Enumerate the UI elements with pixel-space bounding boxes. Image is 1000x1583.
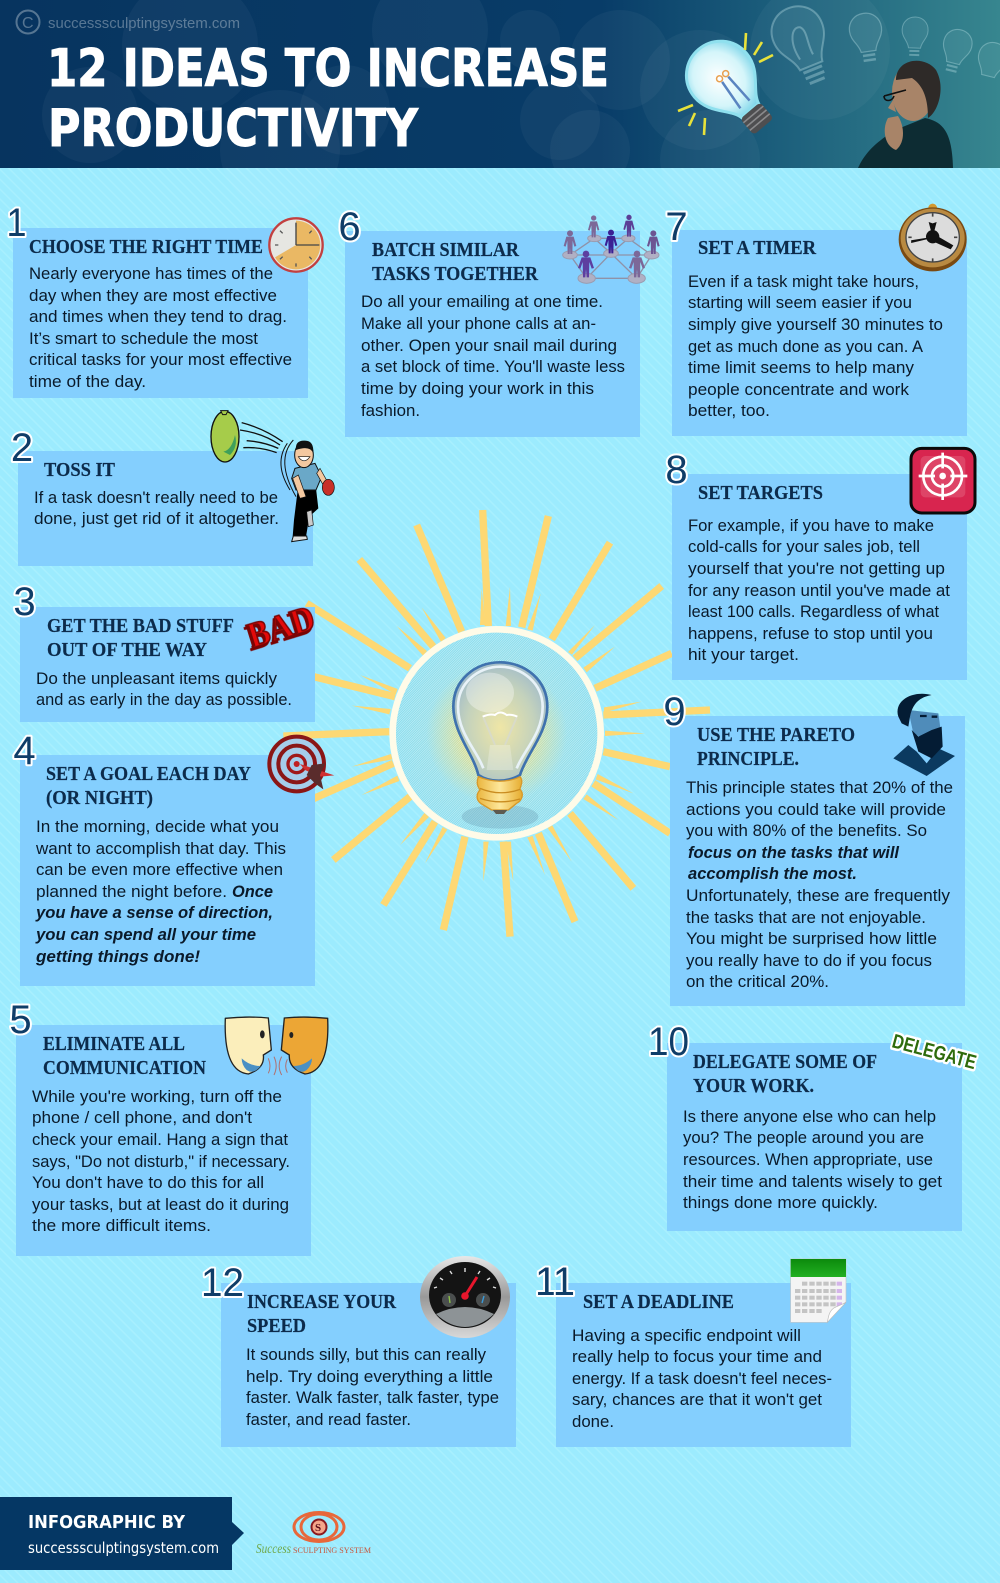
- body text: simply give yourself 30 minutes to: [688, 315, 943, 334]
- body text: [36, 669, 292, 709]
- body text: hit your target.: [688, 645, 799, 664]
- body text: Do the unpleasant items quickly: [36, 669, 277, 688]
- body text: [361, 292, 625, 420]
- icon: portrait of Pareto: [893, 694, 955, 776]
- body text: can be even more effective when: [36, 860, 283, 879]
- body text: get as much done as you can. A: [688, 337, 924, 356]
- body text: a set block of time. You'll waste less: [361, 357, 625, 376]
- logo: Success: [256, 1542, 291, 1557]
- heading: PRINCIPLE.: [697, 749, 799, 770]
- body text: For example, if you have to make: [688, 516, 934, 535]
- body text: says, "Do not disturb," if necessary.: [32, 1152, 290, 1171]
- body text: actions you could take will provide: [686, 800, 946, 819]
- body text: cold-calls for your sales job, tell: [688, 537, 920, 556]
- number 7: 7: [665, 205, 688, 249]
- heading: ELIMINATE ALL: [43, 1034, 185, 1055]
- body text: focus on the tasks that will: [688, 843, 900, 862]
- heading: TASKS TOGETHER: [372, 264, 539, 285]
- heading: COMMUNICATION: [43, 1058, 206, 1079]
- heading: SET A GOAL EACH DAY: [46, 764, 251, 785]
- heading: TOSS IT: [44, 460, 115, 481]
- body text: getting things done!: [35, 947, 200, 966]
- chalk light bulbs: [764, 0, 1000, 90]
- heading: OUT OF THE WAY: [47, 640, 207, 661]
- body text: [688, 516, 950, 664]
- body text: other. Open your snail mail during: [361, 336, 617, 355]
- heading: [43, 1034, 206, 1079]
- icon: calendar: [791, 1259, 846, 1322]
- body text: If a task doesn't really need to be: [34, 488, 278, 507]
- body text: better, too.: [688, 401, 770, 420]
- number 6: 6: [338, 205, 361, 249]
- body text: your tasks, but at least do it during: [32, 1195, 289, 1214]
- logo: S: [315, 1522, 321, 1534]
- body text: day when they are most effective: [29, 286, 277, 305]
- icon: delegate sticker: DELEGATE: [890, 1031, 978, 1074]
- watermark: [16, 10, 240, 34]
- body text: [572, 1326, 832, 1431]
- body text: you can spend all your time: [35, 925, 256, 944]
- body text: Even if a task might take hours,: [688, 272, 919, 291]
- body text: You don't have to do this for all: [32, 1173, 264, 1192]
- central sun with light bulb: [283, 510, 710, 937]
- icon: dart target: [269, 737, 334, 791]
- body text: resources. When appropriate, use: [683, 1150, 933, 1169]
- heading: YOUR WORK.: [693, 1076, 814, 1097]
- body text: time limit seems to help many: [688, 358, 915, 377]
- heading: [697, 725, 855, 770]
- glowing light bulb: [673, 27, 790, 149]
- body text: Is there anyone else who can help: [683, 1107, 936, 1126]
- body text: Having a specific endpoint will: [572, 1326, 801, 1345]
- sun disc: [393, 629, 601, 837]
- logo: [256, 1512, 371, 1557]
- heading: (OR NIGHT): [46, 788, 153, 809]
- icon: network of people: [563, 215, 660, 283]
- body text: help. Try doing everything a little: [246, 1367, 493, 1386]
- title: 12 IDEAS TO INCREASE: [47, 39, 609, 99]
- heading: CHOOSE THE RIGHT TIME: [29, 237, 263, 258]
- body text: accomplish the most.: [688, 864, 857, 883]
- body text: on the critical 20%.: [686, 972, 829, 991]
- number 5: 5: [9, 998, 32, 1042]
- body text: yourself that you're not getting up: [688, 559, 945, 578]
- footer credit ribbon: [0, 1497, 244, 1570]
- heading: INCREASE YOUR: [247, 1292, 397, 1313]
- body text: done, just get rid of it altogether.: [34, 509, 279, 528]
- body text: You might be surprised how little: [686, 929, 937, 948]
- body text: Make all your phone calls at an-: [361, 314, 596, 333]
- man thinking: [858, 61, 953, 168]
- icon: two talking faces: [225, 1017, 328, 1075]
- number 4: 4: [13, 729, 36, 773]
- panel 3: get the bad stuff out of the way: [13, 580, 319, 722]
- icon: speedometer: [420, 1256, 510, 1338]
- body text: time of the day.: [29, 372, 146, 391]
- body text: Unfortunately, these are frequently: [686, 886, 951, 905]
- body text: their time and talents wisely to get: [683, 1172, 942, 1191]
- panel 6: batch similar tasks together: [338, 205, 660, 437]
- body text: you have a sense of direction,: [35, 903, 273, 922]
- heading: BATCH SIMILAR: [372, 240, 520, 261]
- credit heading: INFOGRAPHIC BY: [28, 1512, 186, 1533]
- body text: planned the night before.: [36, 882, 227, 901]
- icon: clock: [269, 218, 323, 272]
- body text: the tasks that are not enjoyable.: [686, 908, 926, 927]
- panel 10: delegate some of your work: [648, 1020, 978, 1231]
- number 3: 3: [13, 580, 36, 624]
- body text: starting will seem easier if you: [688, 293, 912, 312]
- number 11: 11: [535, 1260, 575, 1304]
- icon: BAD stamp: BAD: [243, 598, 319, 656]
- icon: red target button: [911, 448, 975, 513]
- body text: want to accomplish that day. This: [35, 839, 286, 858]
- body text: [688, 272, 943, 420]
- panel 1: choose the right time: [6, 201, 323, 398]
- credit url: successsculptingsystem.com: [28, 1539, 219, 1557]
- icon: stopwatch: [899, 204, 967, 271]
- body text: [686, 778, 953, 991]
- body text: phone / cell phone, and don't: [32, 1108, 252, 1127]
- body text: and times when they tend to drag.: [29, 307, 287, 326]
- body text: sary, chances are that it won't get: [572, 1390, 822, 1409]
- body text: done.: [572, 1412, 614, 1431]
- panel 9: use the pareto principle: [663, 690, 965, 1006]
- number 9: 9: [663, 690, 686, 734]
- body text: This principle states that 20% of the: [686, 778, 953, 797]
- heading: DELEGATE SOME OF: [693, 1052, 877, 1073]
- body text: you with 80% of the benefits. So: [686, 821, 927, 840]
- body text: [32, 1087, 290, 1235]
- title: PRODUCTIVITY: [48, 99, 419, 159]
- body text: least 100 calls. Regardless of what: [688, 602, 939, 621]
- heading: [46, 764, 251, 809]
- panel 4: set a goal each day: [13, 729, 334, 986]
- body text: fashion.: [361, 401, 420, 420]
- body text: for any reason until you've made at: [688, 581, 950, 600]
- heading: SET TARGETS: [698, 483, 823, 504]
- body text: [35, 817, 286, 966]
- body text: critical tasks for your most effective: [29, 350, 292, 369]
- body text: It’s smart to schedule the most: [29, 329, 258, 348]
- panel 2: toss it: [11, 411, 334, 566]
- body text: faster, and read faster.: [246, 1410, 411, 1429]
- panel 12: increase your speed: [201, 1256, 516, 1447]
- heading: SPEED: [247, 1316, 306, 1337]
- number 2: 2: [11, 426, 33, 470]
- heading: SET A DEADLINE: [583, 1292, 734, 1313]
- body text: you? The people around you are: [683, 1128, 924, 1147]
- body text: really help to focus your time and: [572, 1347, 822, 1366]
- body text: Nearly everyone has times of the: [29, 264, 273, 283]
- number 1: 1: [6, 201, 26, 245]
- heading: [693, 1052, 877, 1097]
- watermark: successsculptingsystem.com: [48, 15, 240, 32]
- sun rays: [283, 510, 710, 937]
- icon: man tossing water balloon: [211, 411, 334, 542]
- body text: and as early in the day as possible.: [36, 690, 292, 709]
- number 8: 8: [665, 448, 688, 492]
- body text: It sounds silly, but this can really: [246, 1345, 486, 1364]
- number 12: 12: [201, 1261, 244, 1305]
- body text: energy. If a task doesn't feel neces-: [572, 1369, 832, 1388]
- heading: USE THE PARETO: [697, 725, 855, 746]
- body text: time by doing your work in this: [361, 379, 594, 398]
- body text: Once: [232, 882, 273, 901]
- number 10: 10: [648, 1020, 689, 1064]
- body text: people concentrate and work: [688, 380, 910, 399]
- body text: faster. Walk faster, talk faster, type: [246, 1388, 499, 1407]
- watermark: C: [22, 15, 34, 32]
- body text: you really have to do if you focus: [686, 951, 932, 970]
- body text: things done more quickly.: [683, 1193, 878, 1212]
- heading: [247, 1292, 397, 1337]
- heading: [47, 616, 234, 661]
- logo: SCULPTING SYSTEM: [293, 1546, 371, 1555]
- body text: [34, 488, 279, 528]
- panel 11: set a deadline: [535, 1259, 851, 1447]
- heading: [372, 240, 539, 285]
- body text: [29, 264, 292, 391]
- body text: Do all your emailing at one time.: [361, 292, 603, 311]
- heading: GET THE BAD STUFF: [47, 616, 234, 637]
- panel 5: eliminate all communication: [9, 998, 328, 1256]
- title: [47, 39, 609, 159]
- body text: While you're working, turn off the: [32, 1087, 282, 1106]
- body text: [683, 1107, 942, 1212]
- light bulb: [453, 662, 547, 829]
- body text: In the morning, decide what you: [36, 817, 279, 836]
- panel 7: set a timer: [665, 204, 967, 436]
- body text: happens, refuse to stop until you: [688, 624, 933, 643]
- body text: [246, 1345, 499, 1429]
- panel 8: set targets: [665, 448, 975, 680]
- body text: check your email. Hang a sign that: [32, 1130, 288, 1149]
- body text: the more difficult items.: [32, 1216, 211, 1235]
- heading: SET A TIMER: [698, 238, 817, 259]
- header banner: [0, 0, 1000, 210]
